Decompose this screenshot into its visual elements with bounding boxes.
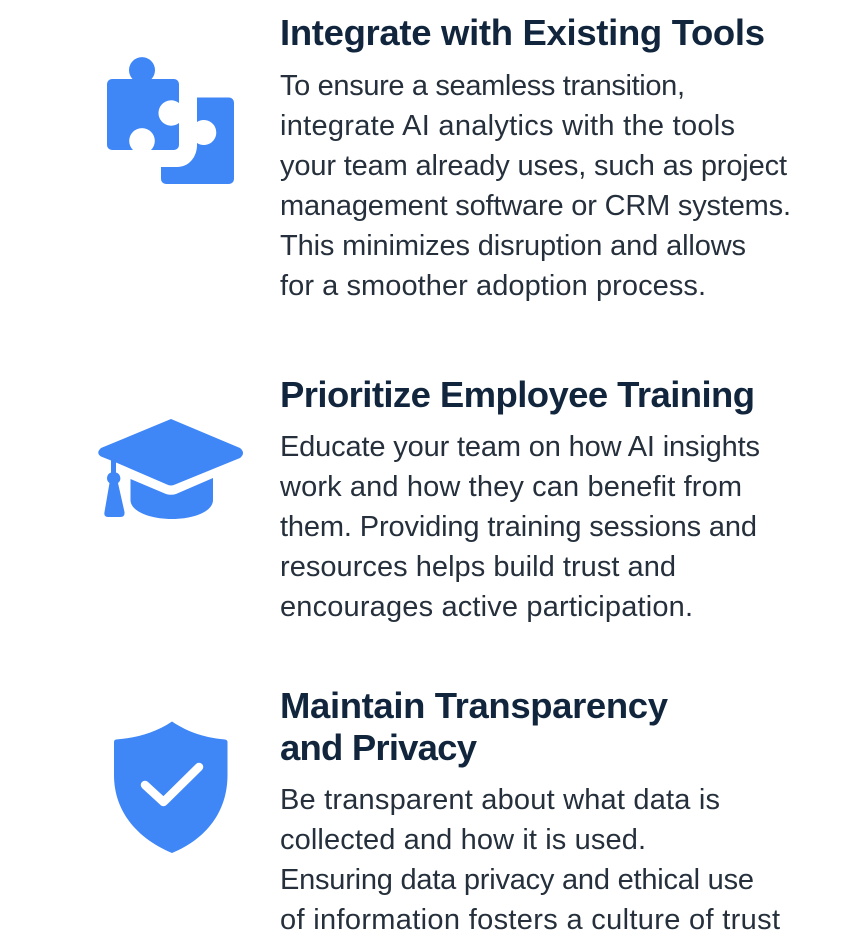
text block: encourages active participation. bbox=[280, 591, 693, 623]
icon: shield with check bbox=[114, 722, 228, 853]
heading: Integrate with Existing Tools bbox=[280, 12, 765, 53]
text block bbox=[280, 70, 791, 302]
text block: integrate AI analytics with the tools bbox=[280, 110, 735, 142]
text block: management software or CRM systems. bbox=[280, 190, 791, 222]
text block: them. Providing training sessions and bbox=[280, 511, 757, 543]
text block: Ensuring data privacy and ethical use bbox=[280, 864, 754, 896]
panel: maintain transparency and privacy bbox=[114, 685, 780, 936]
text block: collected and how it is used. bbox=[280, 824, 646, 856]
text block: To ensure a seamless transition, bbox=[280, 70, 685, 102]
text block: Educate your team on how AI insights bbox=[280, 431, 760, 463]
text block: of information fosters a culture of trust bbox=[280, 904, 780, 936]
heading bbox=[280, 685, 669, 768]
text block: your team already uses, such as project bbox=[280, 150, 787, 182]
panel: prioritize employee training bbox=[98, 374, 760, 623]
text block bbox=[279, 431, 760, 623]
text block: for a smoother adoption process. bbox=[280, 270, 706, 302]
icon: graduation cap bbox=[98, 419, 243, 519]
text block: resources helps build trust and bbox=[280, 551, 676, 583]
text block bbox=[280, 784, 780, 936]
panel: integrate with existing tools bbox=[107, 12, 791, 302]
icon: puzzle pieces bbox=[107, 57, 234, 184]
text block: work and how they can benefit from bbox=[279, 471, 742, 503]
text block: This minimizes disruption and allows bbox=[280, 230, 746, 262]
text block: Be transparent about what data is bbox=[280, 784, 720, 816]
heading: and Privacy bbox=[280, 727, 478, 768]
heading: Prioritize Employee Training bbox=[280, 374, 755, 415]
heading: Maintain Transparency bbox=[280, 685, 669, 726]
